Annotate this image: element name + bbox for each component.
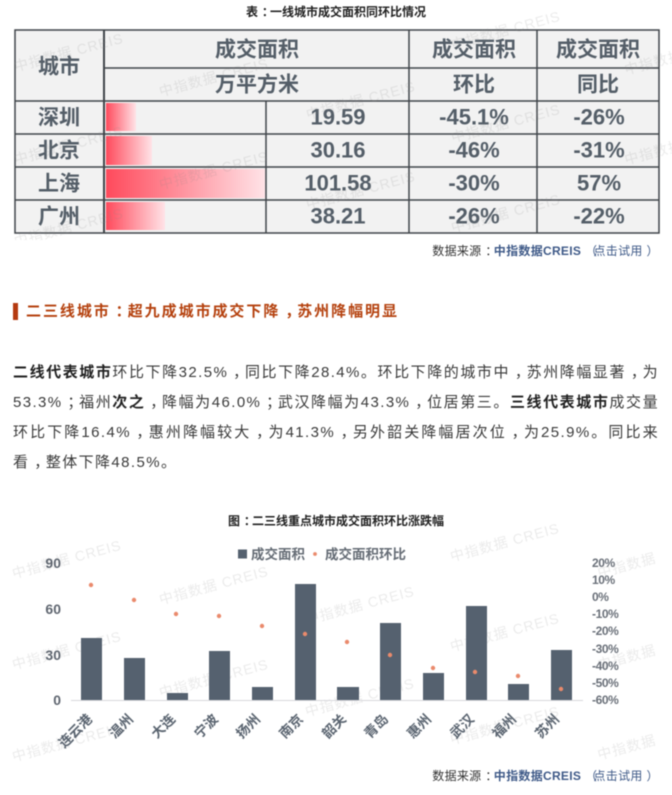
x axis city labels: 连云港 <box>55 710 95 751</box>
right axis labels: -30% <box>592 642 619 656</box>
dots: month-on-month change <box>89 583 563 691</box>
table body values: 上海 <box>38 172 80 196</box>
combo chart: area bars and change dots: 中指数据 CREIS <box>10 720 123 764</box>
right axis labels: 10% <box>592 573 616 587</box>
source note: table: 数据来源 ：中指数据CREIS （点击试用 ） <box>432 244 659 258</box>
right axis labels: -60% <box>592 693 619 707</box>
combo chart: area bars and change dots: 中指数据 CREIS <box>157 656 270 700</box>
combo chart: area bars and change dots: 中指数据 CREIS <box>303 583 416 627</box>
left axis labels: 30 <box>45 647 61 663</box>
left axis labels: 90 <box>45 555 61 571</box>
table title: 表 ：一线城市成交面积同环比情况 <box>246 5 426 19</box>
table body values <box>38 104 625 228</box>
table body values: 19.59 <box>310 104 366 130</box>
x axis city labels <box>55 710 562 751</box>
table: first-tier city transaction area: 中指数据 CREIS <box>157 55 270 99</box>
table: first-tier city transaction area <box>12 8 672 240</box>
chart title: 图 ：二三线重点城市成交面积环比涨跌幅 <box>228 514 444 528</box>
table: first-tier city transaction area: 中指数据 CREIS <box>12 30 125 74</box>
table body values: -22% <box>573 204 625 228</box>
table body values: -45.1% <box>439 104 509 130</box>
x axis city labels: 苏州 <box>532 712 562 741</box>
table header labels: 成交面积 <box>215 38 299 62</box>
right axis labels: 20% <box>592 556 616 570</box>
bar: 北京 <box>106 136 152 165</box>
table body values: 北京 <box>38 138 80 162</box>
right axis labels: -10% <box>592 607 619 621</box>
chart legend: 成交面积 <box>251 546 305 562</box>
table body values: 57% <box>577 170 621 196</box>
x axis city labels: 武汉 <box>447 711 477 741</box>
table: first-tier city transaction area: 中指数据 CREIS <box>304 78 417 122</box>
x axis city labels: 南京 <box>276 711 306 741</box>
chart legend <box>238 546 406 562</box>
table header labels: 成交面积 <box>432 38 516 62</box>
x axis city labels: 福州 <box>489 712 519 741</box>
table: first-tier city transaction area: 中指数据 CREIS <box>12 123 125 167</box>
x axis city labels: 温州 <box>106 712 136 741</box>
combo chart: area bars and change dots: 中指数据 <box>596 642 658 673</box>
table: first-tier city transaction area: 中指数据 CREIS <box>449 101 562 145</box>
bar: 深圳 <box>106 103 136 131</box>
right axis labels: -40% <box>592 659 619 673</box>
source note: chart: 数据来源 ：中指数据CREIS （点击试用 ） <box>432 769 659 783</box>
combo chart: area bars and change dots: 中指数据 <box>596 732 658 763</box>
table body values: -46% <box>448 138 500 162</box>
table header labels: 环比 <box>453 74 495 96</box>
x axis city labels: 宁波 <box>191 710 221 741</box>
x axis city labels: 大连 <box>148 710 178 741</box>
body paragraph: 二线代表城市环比下降32.5% ，同比下降28.4%。环比下降的城市中 ，苏州降幅显著 ，为 <box>13 364 659 381</box>
bar: 上海 <box>106 169 265 198</box>
x axis line <box>71 700 583 702</box>
table body values: -26% <box>573 104 625 130</box>
table body values: -31% <box>573 138 625 162</box>
body paragraph <box>13 363 659 471</box>
table body values: 30.16 <box>310 138 366 162</box>
right axis labels: -20% <box>592 624 619 638</box>
section heading: 二三线城市 ：超九成城市成交下降 ，苏州降幅明显 <box>26 303 399 320</box>
right axis labels <box>592 556 619 707</box>
table: first-tier city transaction area: 中指数据 CREIS <box>157 148 270 192</box>
body paragraph: 看 ，整体下降48.5%。 <box>13 454 177 471</box>
table header labels: 万平方米 <box>215 72 299 96</box>
x axis city labels: 青岛 <box>361 711 391 741</box>
left axis labels <box>45 555 61 708</box>
x axis city labels: 韶关 <box>319 710 349 741</box>
chart legend: 成交面积环比 <box>325 546 406 562</box>
table body values: 101.58 <box>304 170 372 196</box>
bar: 广州 <box>106 202 165 230</box>
body paragraph: 环比下降16.4% ，惠州降幅较大 ，为41.3% ，另外韶关降幅居次位 ，为25.9%。同比来 <box>13 424 659 441</box>
left axis labels: 0 <box>53 692 61 708</box>
x axis city labels: 惠州 <box>404 712 434 741</box>
combo chart: area bars and change dots: 中指数据 <box>596 550 658 581</box>
combo chart: area bars and change dots: 中指数据 CREIS <box>448 610 561 654</box>
table header labels: 同比 <box>577 74 619 96</box>
bars: transaction area <box>81 584 572 700</box>
combo chart: area bars and change dots: 中指数据 CREIS <box>10 628 123 672</box>
table body values: -26% <box>448 204 500 228</box>
combo chart: area bars and change dots: 中指数据 CREIS <box>303 675 416 719</box>
table: first-tier city transaction area: 中指数据 CREIS <box>304 168 417 212</box>
combo chart: area bars and change dots: 中指数据 CREIS <box>448 520 561 564</box>
body paragraph: 53.3% ；福州次之 ，降幅为46.0% ；武汉降幅为43.3% ，位居第三。三线代表城市成交量 <box>13 394 659 411</box>
left axis labels: 60 <box>45 601 61 617</box>
table body values: -30% <box>448 170 500 196</box>
table header labels: 城市 <box>38 54 80 78</box>
table: first-tier city transaction area: 中指数据 CREIS <box>449 8 562 52</box>
combo chart: area bars and change dots: 中指数据 CREIS <box>10 537 123 581</box>
right axis labels: -50% <box>592 676 619 690</box>
table: first-tier city transaction area: 中指数据 CREIS <box>449 191 562 235</box>
table header labels <box>38 38 640 96</box>
table header labels: 成交面积 <box>556 38 640 62</box>
table body values: 38.21 <box>310 204 366 228</box>
combo chart: area bars and change dots: 中指数据 CREIS <box>448 703 561 747</box>
right axis labels: 0% <box>592 590 609 604</box>
x axis city labels: 扬州 <box>233 711 263 741</box>
combo chart: area bars and change dots: 中指数据 CREIS <box>157 563 270 607</box>
table body values: 深圳 <box>38 106 80 130</box>
table body values: 广州 <box>38 206 80 228</box>
